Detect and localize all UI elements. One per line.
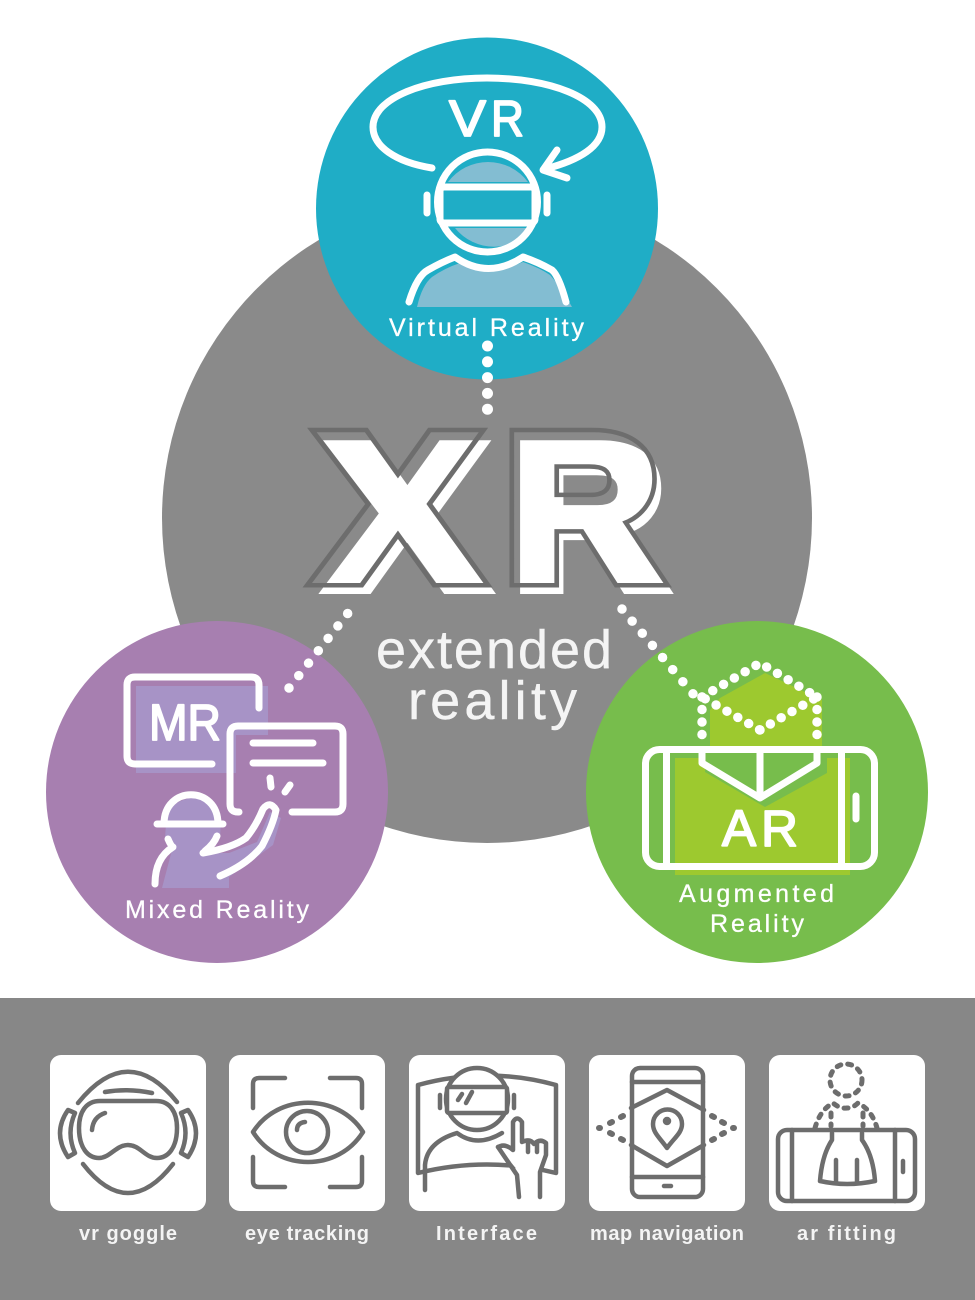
panel: bottom icon strip — [0, 998, 975, 1300]
VR label: R — [491, 90, 524, 147]
icon: vr goggle — [60, 1072, 196, 1193]
tile: vr goggle — [50, 1055, 206, 1245]
tile: ar fitting — [769, 1055, 925, 1245]
label: Augmented Reality: Augmented — [679, 880, 834, 908]
label: Interface: Interface — [436, 1223, 537, 1245]
XR title: R — [512, 402, 667, 632]
dotted cube — [702, 663, 817, 742]
label: Augmented Reality: Reality — [710, 910, 804, 938]
subtitle: extended reality — [376, 620, 612, 731]
tile: eye tracking — [229, 1055, 385, 1245]
XR title: X — [320, 392, 476, 622]
XR title: X — [329, 401, 486, 632]
icon: AR phone with cube — [646, 663, 874, 875]
label: Mixed Reality: Mixed Reality — [125, 896, 310, 924]
AR label: AR — [722, 800, 798, 857]
label: vr goggle: vr goggle — [79, 1223, 177, 1245]
label: eye tracking: eye tracking — [245, 1223, 369, 1245]
panel: mixed reality — [46, 621, 388, 963]
label: map navigation: map navigation — [590, 1223, 744, 1245]
subtitle: extended reality: reality — [408, 671, 577, 731]
label: Augmented Reality — [679, 880, 834, 938]
subtitle: extended reality: extended — [376, 620, 612, 680]
icon: ar fitting — [778, 1064, 915, 1201]
dotted connector: VR to XR — [482, 346, 493, 412]
panel: augmented reality — [586, 621, 928, 963]
tile: interface — [409, 1055, 565, 1245]
MR label: MR — [149, 694, 221, 751]
XR title: R — [504, 392, 659, 623]
dotted connector: XR to MR — [289, 608, 352, 688]
dotted connector: XR to AR — [622, 609, 694, 695]
label: Virtual Reality: Virtual Reality — [389, 314, 584, 342]
label: ar fitting: ar fitting — [797, 1223, 896, 1245]
VR label: V — [449, 90, 486, 147]
panel: central XR circle — [162, 193, 812, 843]
tile: map navigation — [589, 1055, 745, 1245]
icon: interface — [418, 1068, 556, 1197]
panel: virtual reality — [316, 38, 658, 380]
icon: map navigation — [599, 1068, 734, 1197]
icon: MR person with screens — [127, 677, 343, 888]
VR label — [449, 90, 524, 147]
icon: VR headset user — [373, 78, 602, 307]
icon: eye tracking — [253, 1078, 363, 1187]
XR title — [302, 428, 674, 594]
